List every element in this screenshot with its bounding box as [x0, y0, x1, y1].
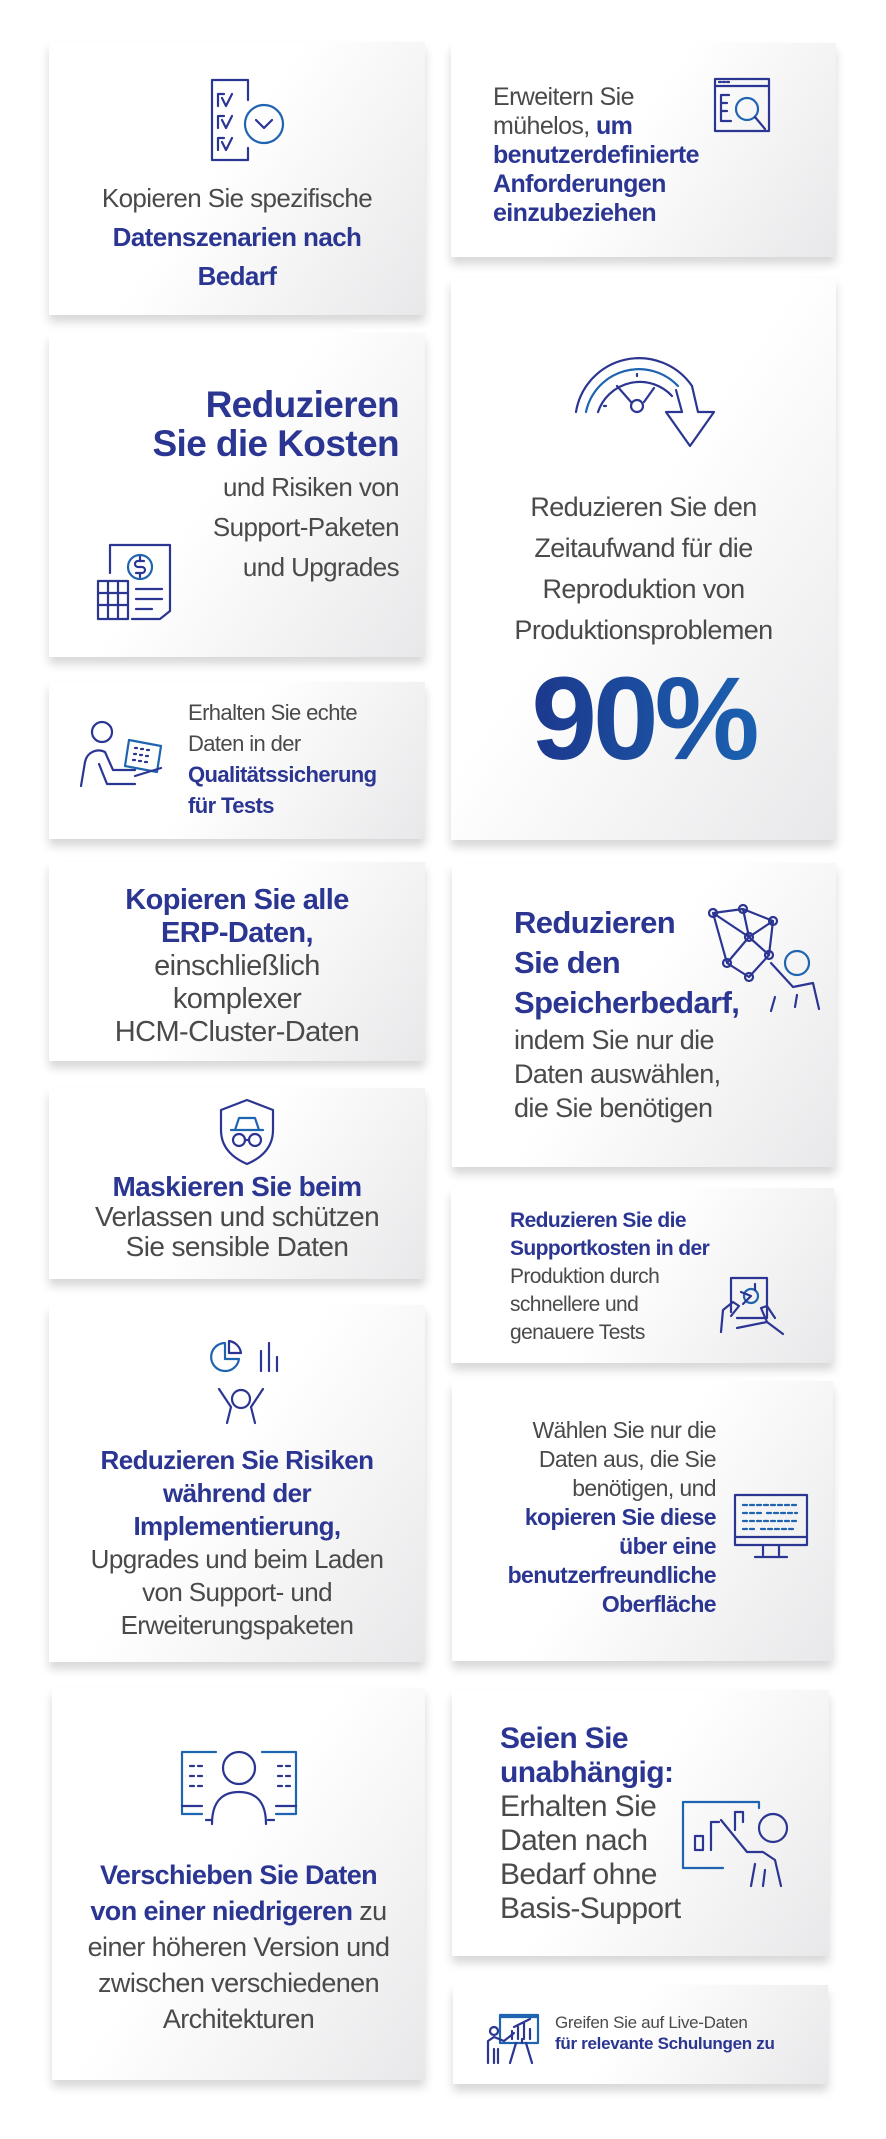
- card: kopieren spezifische: [49, 42, 425, 315]
- text: Reproduktion von: [542, 574, 745, 604]
- text: Bedarf: [198, 261, 276, 291]
- text: Produktionsproblemen: [514, 615, 773, 645]
- text: [88, 1860, 389, 2034]
- card: speicherbedarf: [452, 863, 836, 1167]
- icon: shield spy: [220, 1098, 274, 1166]
- card: live-daten schulungen: [453, 1985, 828, 2084]
- text: Basis-Support: [500, 1892, 681, 1925]
- text: kopieren Sie diese: [525, 1504, 716, 1530]
- text: Erweitern Sie: [493, 83, 634, 111]
- icon: person screens: [180, 1750, 298, 1826]
- text: Erweiterungspaketen: [121, 1610, 353, 1640]
- icon: network person: [708, 904, 820, 1012]
- text: während der: [163, 1478, 311, 1508]
- text: benötigen, und: [572, 1475, 716, 1501]
- card: reduzieren kosten: Support-Paketen: [213, 512, 399, 542]
- text: [514, 905, 739, 1020]
- icon: person chart: [210, 1340, 278, 1424]
- text: [500, 1722, 681, 1925]
- text: Kopieren Sie alle: [125, 884, 349, 916]
- text: Daten nach: [500, 1824, 647, 1857]
- text: [508, 1417, 716, 1617]
- text: komplexer: [173, 983, 301, 1015]
- text: [95, 1171, 379, 1262]
- text: Upgrades und beim Laden: [91, 1544, 383, 1574]
- text: Reduzieren: [206, 384, 399, 425]
- text: über eine: [619, 1533, 716, 1559]
- icon: clock arrow: [574, 357, 716, 448]
- card: speicherbedarf: Daten auswählen,: [514, 1059, 721, 1089]
- text: Reduzieren Sie den: [530, 492, 757, 522]
- icon: browser search: [714, 78, 770, 132]
- card: echte daten QS: [49, 682, 425, 839]
- text: Sie sensible Daten: [126, 1231, 348, 1262]
- text: Datenszenarien nach: [113, 222, 361, 252]
- big number 90%: 90%: [531, 653, 756, 785]
- icon: person laptop: [80, 720, 162, 788]
- text: Kopieren Sie spezifische: [102, 183, 372, 213]
- icon: training board: [486, 2014, 540, 2064]
- text: Erhalten Sie: [500, 1790, 656, 1823]
- card: speicherbedarf: die Sie benötigen: [514, 1093, 712, 1123]
- card: speicherbedarf: indem Sie nur die: [514, 1025, 714, 1055]
- card: verschieben daten: [52, 1688, 425, 2080]
- text: einschließlich: [154, 950, 320, 982]
- text: Oberfläche: [602, 1591, 716, 1617]
- text: Reduzieren Sie die: [510, 1209, 686, 1232]
- big number 90%: [451, 654, 836, 784]
- card: ERP daten: [49, 862, 425, 1061]
- text: von Support- und: [142, 1577, 332, 1607]
- text: [188, 700, 376, 818]
- text: Greifen Sie auf Live-Daten: [555, 2013, 748, 2032]
- text: ERP-Daten,: [161, 917, 313, 949]
- text: einzubeziehen: [493, 199, 656, 227]
- text: einer höheren Version und: [88, 1932, 389, 1962]
- text: Produktion durch: [510, 1265, 659, 1288]
- text: Zeitaufwand für die: [534, 533, 753, 563]
- text: [510, 1209, 710, 1344]
- text: schnellere und: [510, 1293, 638, 1316]
- text: unabhängig:: [500, 1756, 673, 1789]
- card: reduzieren kosten: und Risiken von: [223, 472, 399, 502]
- text: zwischen verschiedenen: [98, 1968, 379, 1998]
- text: Sie die Kosten: [152, 423, 399, 464]
- text: benutzerfreundliche: [508, 1562, 716, 1588]
- card: oberfläche: [452, 1381, 833, 1661]
- text: Sie den: [514, 945, 620, 980]
- text: [555, 2013, 775, 2053]
- text: benutzerdefinierte: [493, 141, 699, 169]
- card: erweitern: [451, 43, 836, 257]
- text: [115, 884, 359, 1048]
- text: für relevante Schulungen zu: [555, 2034, 775, 2053]
- text: Verlassen und schützen: [95, 1201, 379, 1232]
- text: Maskieren Sie beim: [112, 1171, 362, 1202]
- card: zeitaufwand 90%: [451, 278, 836, 840]
- text: Architekturen: [163, 2004, 314, 2034]
- text: Bedarf ohne: [500, 1858, 657, 1891]
- text: genauere Tests: [510, 1321, 645, 1344]
- text: Qualitätssicherung: [188, 762, 376, 787]
- icon: invoice: [96, 544, 172, 620]
- icon: monitor: [734, 1494, 808, 1558]
- text: Verschieben Sie Daten: [100, 1860, 377, 1890]
- text: HCM-Cluster-Daten: [115, 1016, 359, 1048]
- text: Seien Sie: [500, 1722, 628, 1755]
- text: Daten aus, die Sie: [539, 1446, 716, 1472]
- text: Erhalten Sie echte: [188, 700, 357, 725]
- card: risiken implementierung: [49, 1305, 425, 1662]
- icon: presenter board: [682, 1800, 788, 1888]
- text: [91, 1445, 383, 1640]
- text: Reduzieren Sie Risiken: [101, 1445, 373, 1475]
- text: [493, 83, 699, 227]
- text: [102, 183, 372, 291]
- text: Wählen Sie nur die: [532, 1417, 716, 1443]
- text: Supportkosten in der: [510, 1237, 709, 1260]
- text: Reduzieren: [514, 905, 675, 940]
- text: [152, 384, 399, 464]
- text: für Tests: [188, 793, 274, 818]
- text: von einer niedrigeren zu: [90, 1896, 387, 1926]
- card: unabhängig: [452, 1690, 829, 1956]
- text: Implementierung,: [133, 1511, 341, 1541]
- icon: tablet hands: [720, 1276, 784, 1336]
- card: reduzieren kosten: [49, 333, 425, 657]
- text: Anforderungen: [493, 170, 666, 198]
- text: mühelos, um: [493, 112, 632, 140]
- icon: checklist clock: [210, 78, 284, 162]
- card: supportkosten: [451, 1188, 834, 1363]
- text: Daten in der: [188, 731, 301, 756]
- card: maskieren: [49, 1088, 425, 1279]
- text: [514, 492, 773, 645]
- card: reduzieren kosten: und Upgrades: [243, 552, 399, 582]
- text: Speicherbedarf,: [514, 985, 739, 1020]
